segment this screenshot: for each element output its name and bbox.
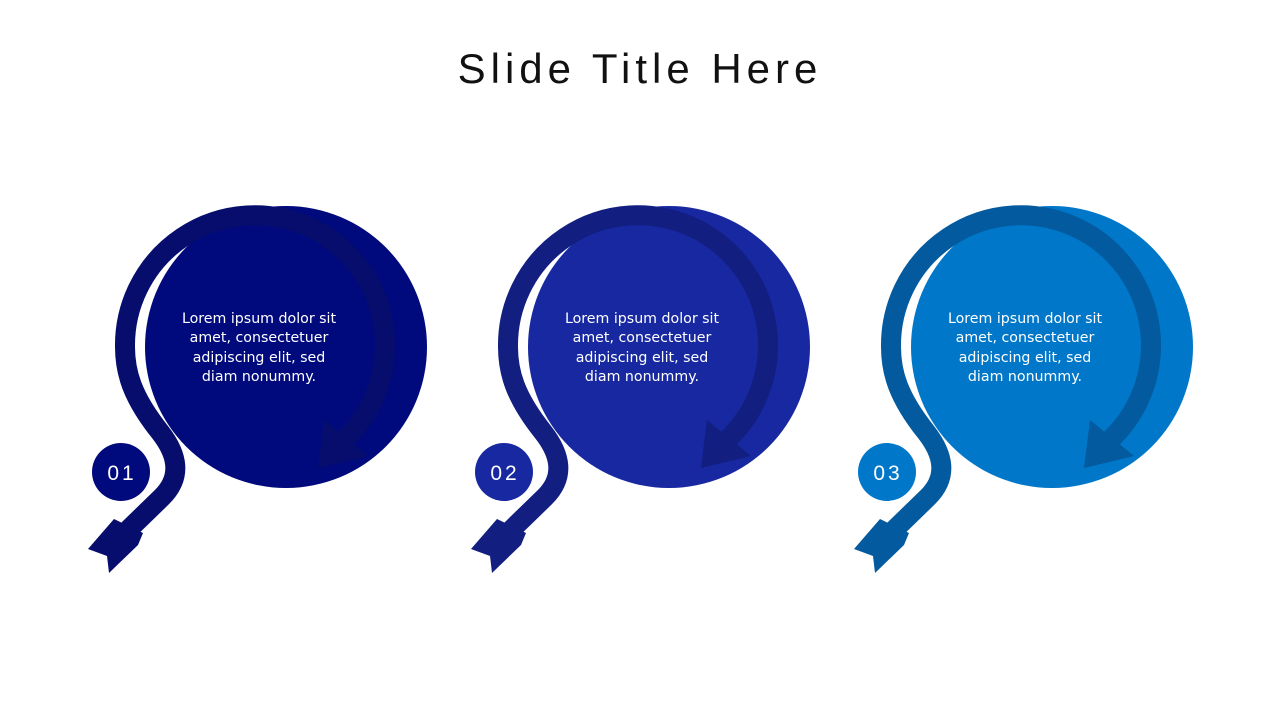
number badge 01 xyxy=(92,443,150,501)
circle 3 xyxy=(911,206,1193,488)
text 3: Lorem ipsum dolor sit xyxy=(948,311,1102,327)
arrow 3 xyxy=(854,215,1151,573)
number badge 01: 01 xyxy=(107,462,137,485)
number badge 03: 03 xyxy=(873,462,903,485)
text 3: adipiscing elit, sed xyxy=(959,350,1091,366)
text 2: diam nonummy. xyxy=(585,369,699,385)
number badge 02: 02 xyxy=(490,462,520,485)
text 2: adipiscing elit, sed xyxy=(576,350,708,366)
circle 2 xyxy=(528,206,810,488)
text 2: Lorem ipsum dolor sit xyxy=(565,311,719,327)
text 1: amet, consectetuer xyxy=(190,330,328,346)
arrow 1 xyxy=(88,215,385,573)
text 1: adipiscing elit, sed xyxy=(193,350,325,366)
step 3 xyxy=(854,206,1193,573)
title: Slide Title Here xyxy=(458,45,822,92)
text 1 xyxy=(182,311,336,385)
text 2: amet, consectetuer xyxy=(573,330,711,346)
text 3: diam nonummy. xyxy=(968,369,1082,385)
arrow 2 xyxy=(471,215,768,573)
text 3: amet, consectetuer xyxy=(956,330,1094,346)
step 1 xyxy=(88,206,427,573)
step 2 xyxy=(471,206,810,573)
number badge 03 xyxy=(858,443,916,501)
text 2 xyxy=(565,311,719,385)
text 3 xyxy=(948,311,1102,385)
number badge 02 xyxy=(475,443,533,501)
text 1: diam nonummy. xyxy=(202,369,316,385)
text 1: Lorem ipsum dolor sit xyxy=(182,311,336,327)
circle 1 xyxy=(145,206,427,488)
